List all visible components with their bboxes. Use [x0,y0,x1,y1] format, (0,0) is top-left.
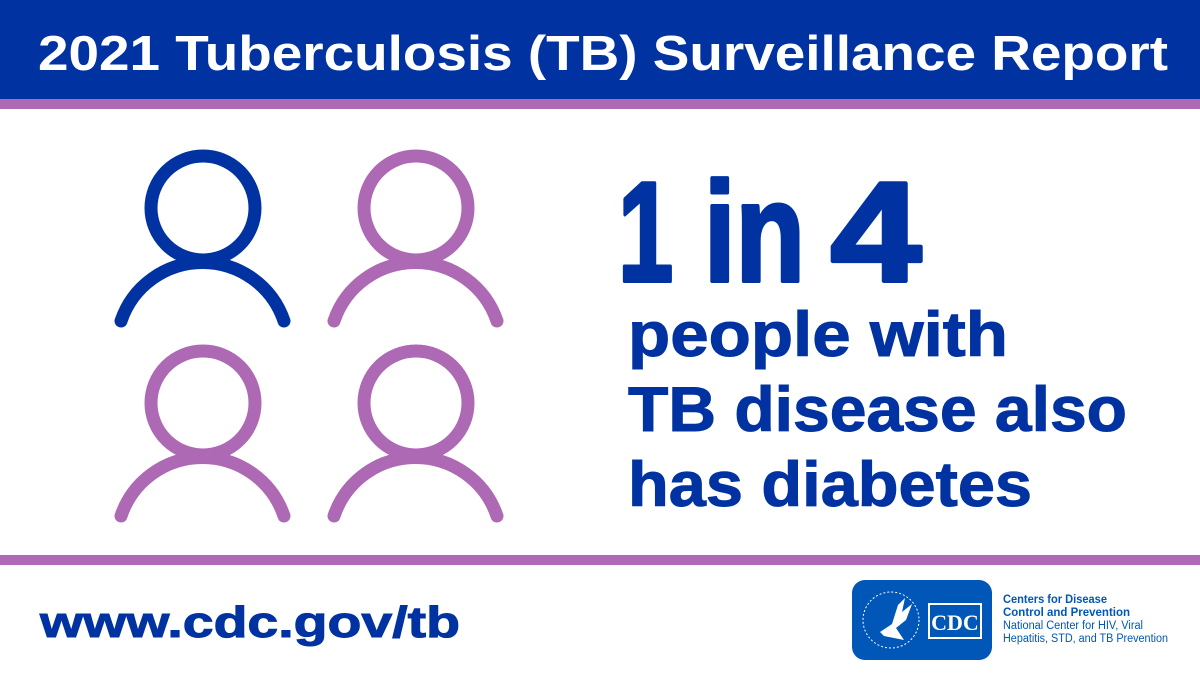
icon: person blue [121,156,284,321]
icon: person purple 4 [334,351,497,516]
logo text: National Center for HIV, Viral [1003,620,1143,632]
big number: 1 in 4 [618,152,921,312]
logo: HHS / CDC: CDC [931,610,979,635]
big number: 1 in 4: in [704,154,805,312]
icon: person purple 2 [334,156,497,321]
logo: HHS / CDC [852,580,992,660]
description: has diabetes [628,450,1032,520]
description: people with [628,300,1008,370]
logo text: Control and Prevention [1003,607,1130,619]
logo text: Hepatitis, STD, and TB Prevention [1003,633,1168,645]
title: 2021 Tuberculosis (TB) Surveillance Report [38,27,1168,81]
icon group: four people [121,156,497,516]
header bar [0,0,1200,109]
logo text: Centers for Disease [1003,594,1107,606]
logo text [1003,594,1168,645]
big number: 1 in 4: 4 [830,153,921,312]
description [628,300,1127,520]
statistic text [618,152,1127,520]
url: www.cdc.gov/tb [39,598,460,647]
description: TB disease also [628,375,1127,445]
big number: 1 in 4: 1 [618,152,673,311]
icon: person purple 3 [121,351,284,516]
